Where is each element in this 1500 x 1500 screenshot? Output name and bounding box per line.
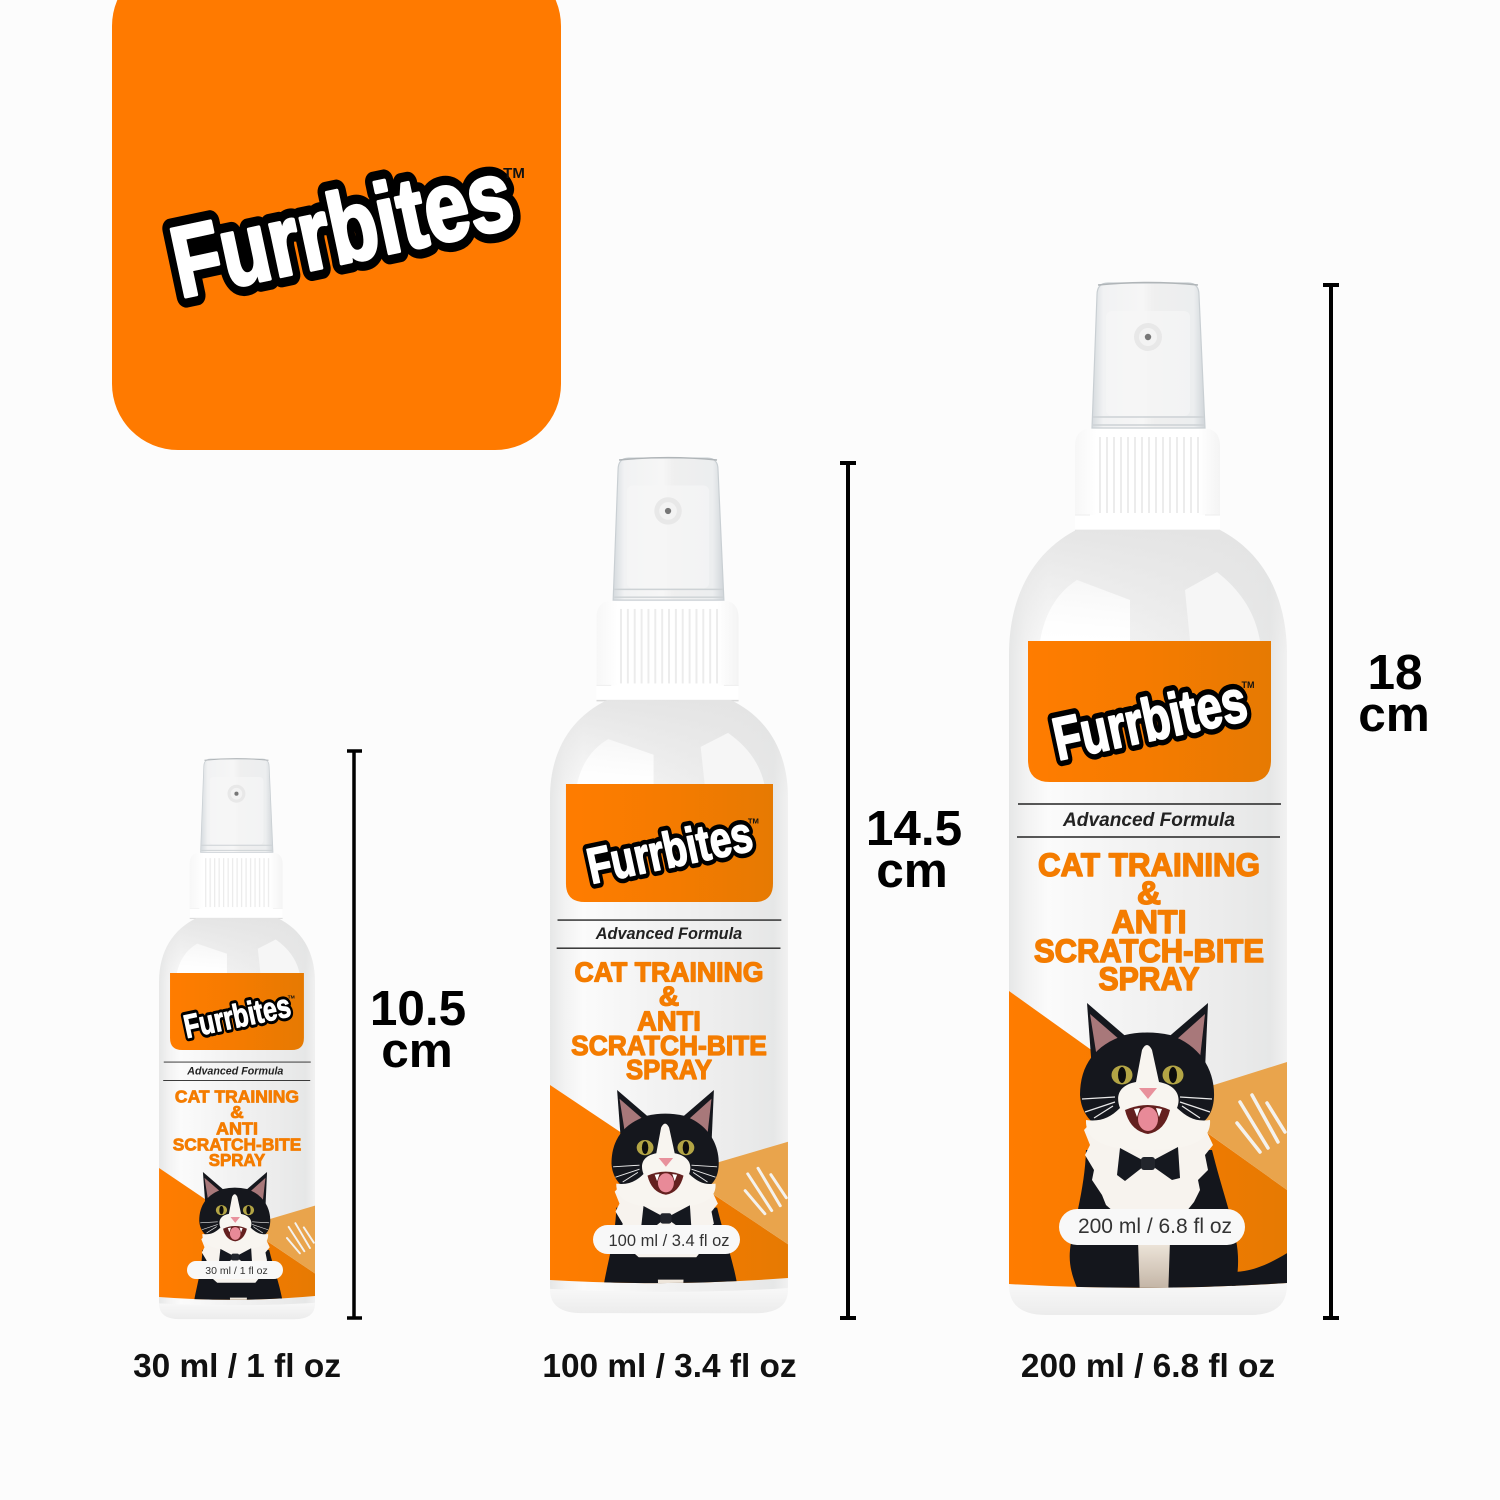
label: product text: & (659, 980, 679, 1012)
height bracket: 10.5 cm (347, 751, 362, 1318)
height label: 18 cm: 18 (1367, 645, 1423, 700)
bottle body (1009, 530, 1287, 1315)
label: product text: CAT TRAINING (575, 957, 763, 988)
height label: 10.5 cm: 10.5 (370, 981, 466, 1036)
label: logo block: Furrbites (1047, 667, 1253, 773)
trademark: TM (503, 165, 525, 182)
label: logo block: TM (1242, 680, 1254, 690)
label: product text: Advanced Formula (595, 925, 742, 943)
label: product text: ANTI (637, 1005, 701, 1036)
panel: brand logo (112, 0, 561, 450)
size pill (1059, 1209, 1245, 1245)
label: product text: SCRATCH-BITE (571, 1030, 767, 1061)
logo wordmark: Furrbites (162, 138, 522, 319)
label: logo block (566, 784, 773, 902)
size pill: 30 ml / 1 fl oz (205, 1265, 268, 1277)
label: logo block: TM (288, 995, 295, 1001)
size pill: 100 ml / 3.4 fl oz (608, 1232, 730, 1250)
bottle cap and collar (596, 458, 739, 701)
cat illustration (1009, 991, 1292, 1300)
logo wordmark: Furrbites (162, 138, 522, 319)
label: product text: SPRAY (1098, 961, 1200, 997)
volume label: 200 ml: 200 ml / 6.8 fl oz (1021, 1348, 1275, 1385)
label: logo block: Furrbites (180, 987, 294, 1045)
bottle: 100 ml (550, 458, 788, 1332)
label: product text: SPRAY (626, 1054, 712, 1085)
label: logo block: Furrbites (582, 805, 757, 895)
height label: 14.5 cm (866, 801, 962, 898)
volume label: 100 ml: 100 ml / 3.4 fl oz (542, 1348, 797, 1385)
bottle cap and collar (1075, 282, 1220, 530)
label: logo block: Furrbites (582, 805, 757, 895)
label: logo block: TM (748, 816, 759, 825)
label: product text: CAT TRAINING (1038, 847, 1260, 883)
cat illustration (159, 1168, 315, 1300)
height bracket: 18 cm (1323, 285, 1339, 1318)
cat illustration (550, 1085, 788, 1284)
bottle: 200 ml (1009, 282, 1292, 1315)
label: product text: SCRATCH-BITE (1034, 933, 1264, 969)
label: product text: ANTI (1112, 904, 1186, 940)
label: logo block: Furrbites (1047, 667, 1253, 773)
height label: 14.5 cm: cm (876, 843, 948, 898)
label: product text: SPRAY (209, 1150, 265, 1170)
height label: 14.5 cm: 14.5 (866, 801, 962, 856)
label: product text: & (1137, 875, 1161, 911)
volume label: 30 ml: 30 ml / 1 fl oz (133, 1348, 341, 1385)
size pill: 200 ml / 6.8 fl oz (1078, 1215, 1232, 1238)
label: product text: ANTI (216, 1118, 258, 1138)
bottle cap and collar (190, 759, 283, 918)
bottle body (159, 918, 315, 1319)
bottle: 30 ml (159, 759, 315, 1332)
height label: 18 cm (1358, 645, 1430, 742)
height label: 18 cm: cm (1358, 687, 1430, 742)
label: logo block: Furrbites (180, 987, 294, 1045)
label: logo block (170, 973, 304, 1050)
label: product text: Advanced Formula (1062, 810, 1235, 831)
height bracket: 14.5 cm (840, 463, 856, 1318)
size pill (187, 1261, 283, 1279)
label: product text: Advanced Formula (186, 1065, 283, 1077)
label: product text (1017, 804, 1281, 997)
label: product text: & (230, 1102, 244, 1122)
label: product text (557, 920, 781, 1085)
label: product text (163, 1062, 311, 1170)
bottle body (550, 700, 788, 1313)
label: product text: SCRATCH-BITE (173, 1135, 301, 1155)
size pill (593, 1225, 740, 1254)
height label: 10.5 cm: cm (381, 1023, 453, 1078)
label: product text: CAT TRAINING (175, 1086, 299, 1106)
label: logo block (1028, 641, 1271, 782)
height label: 10.5 cm (370, 981, 466, 1078)
